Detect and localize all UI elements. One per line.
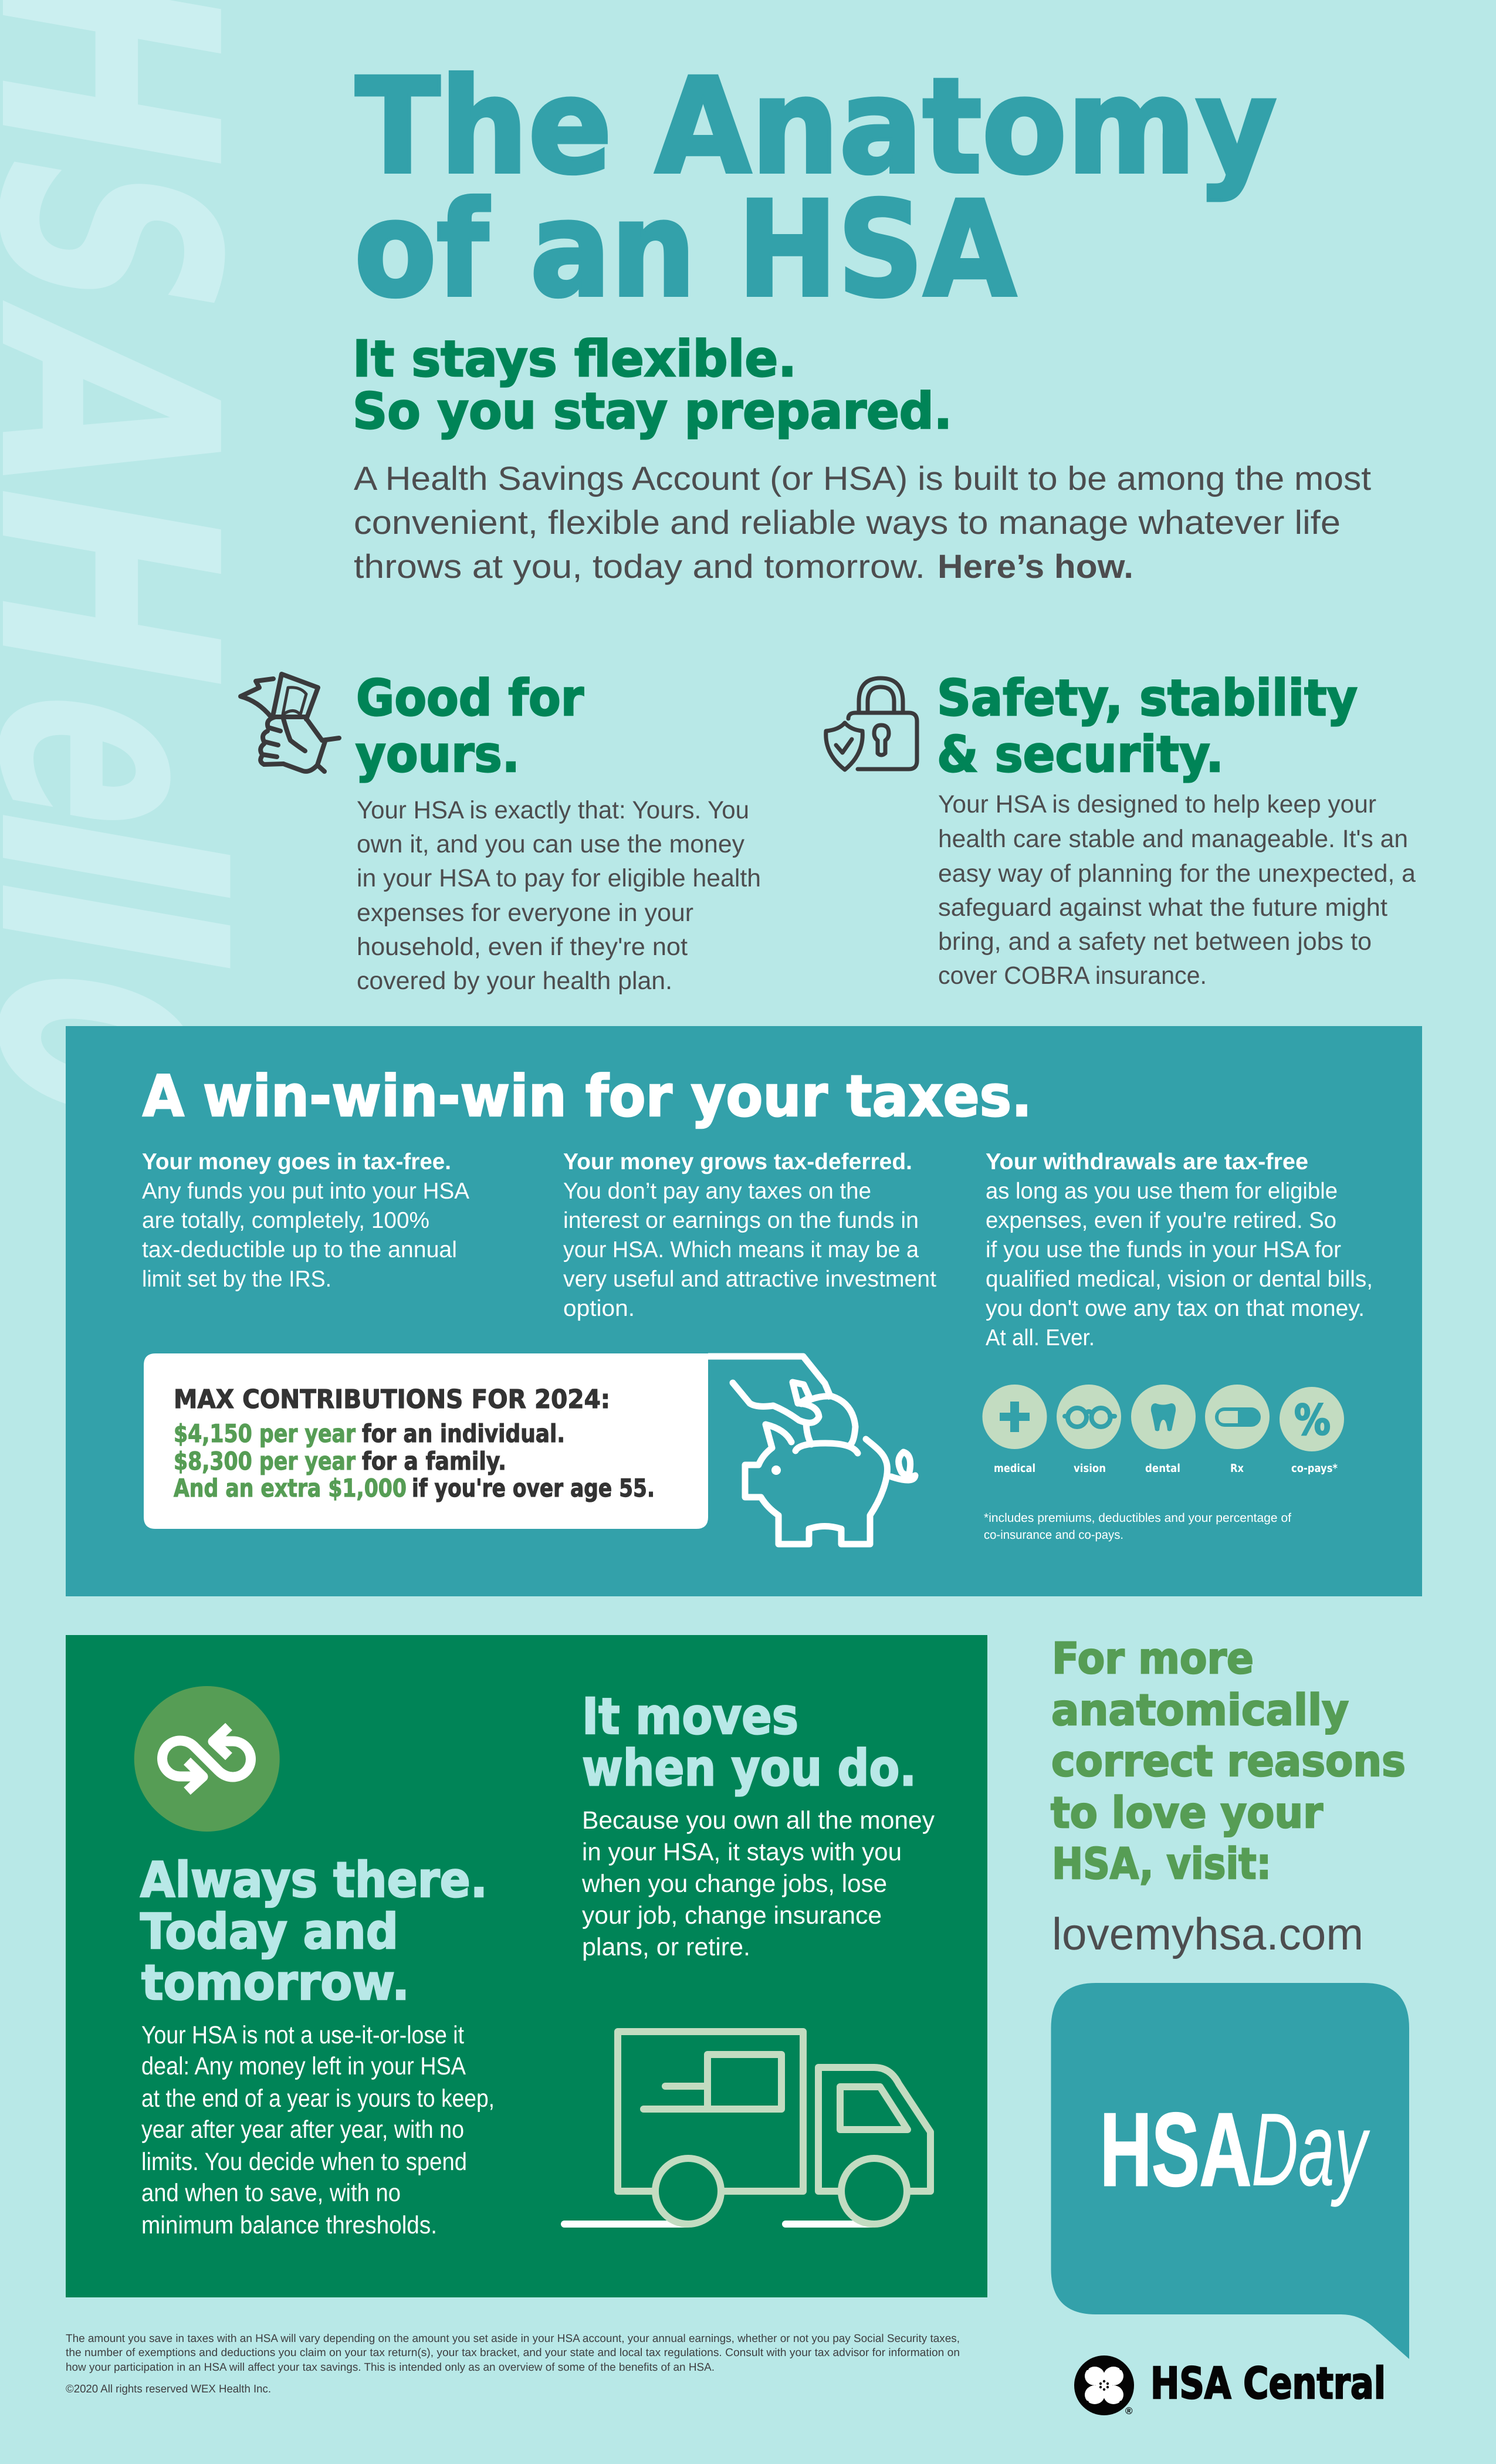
icon: dental: dental [1145, 1462, 1180, 1475]
body text: cover COBRA insurance. [938, 962, 1207, 990]
callout: max contributions: MAX CONTRIBUTIONS FOR 2024: [174, 1385, 610, 1414]
heading: it moves [582, 1688, 916, 1798]
column 1 [142, 1149, 469, 1292]
footnote: co-insurance and co-pays. [984, 1528, 1123, 1542]
heading: For more [1052, 1634, 1254, 1684]
column 3: Your withdrawals are tax-free [986, 1149, 1308, 1175]
callout: max contributions: $8,300 per year [174, 1447, 356, 1475]
intro paragraph [354, 460, 1371, 585]
column 2: Your money grows tax-deferred. [563, 1149, 912, 1175]
callout: max contributions: for an individual. [362, 1419, 565, 1448]
column 1: Any funds you put into your HSA [142, 1179, 469, 1204]
footnote [984, 1511, 1291, 1542]
body text: in your HSA to pay for eligible health [357, 865, 761, 892]
column 1: Your money goes in tax-free. [142, 1149, 451, 1175]
heading: always there [140, 1852, 488, 2011]
callout: max contributions [144, 1353, 708, 1529]
body: always there: and when to save, with no [141, 2179, 401, 2207]
body: always there: limits. You decide when to spend [141, 2148, 467, 2176]
column 2: your HSA. Which means it may be a [563, 1237, 919, 1263]
body: it moves [581, 1807, 935, 1961]
heading: & security. [937, 726, 1224, 784]
footer disclaimer: The amount you save in taxes with an HSA will vary depending on the amount you set aside in your HSA account, your annual earnings, whether or not you pay Social Security taxes, [66, 2333, 960, 2345]
logo: HSA Central: ® [1125, 2405, 1133, 2416]
body: it moves: Because you own all the money [582, 1807, 935, 1835]
logo: HSA Central: HSA Central [1150, 2358, 1386, 2409]
column 1: are totally, completely, 100% [142, 1208, 429, 1233]
body text: Your HSA is designed to help keep your [938, 791, 1376, 818]
heading: always there: Today and [140, 1903, 398, 1960]
heading: anatomically [1051, 1685, 1349, 1735]
body text: expenses for everyone in your [357, 899, 693, 927]
column 3: as long as you use them for eligible [986, 1179, 1338, 1204]
icon: vision [1057, 1385, 1121, 1475]
callout: max contributions: if you're over age 55. [412, 1474, 655, 1502]
logo: HSA Day speech bubble: Day [1251, 2091, 1370, 2208]
heading: yours. [356, 726, 520, 784]
icons row: eligible expenses [982, 1385, 1344, 1475]
column 3 [986, 1149, 1373, 1351]
column 3: qualified medical, vision or dental bills, [986, 1267, 1373, 1292]
subtitle [353, 330, 952, 441]
title [354, 50, 1277, 326]
body: it moves: your job, change insurance [582, 1902, 882, 1930]
icon: medical: medical [994, 1462, 1035, 1475]
column 2: interest or earnings on the funds in [563, 1208, 919, 1233]
body: it moves: in your HSA, it stays with you [582, 1839, 902, 1866]
icon: moving truck [564, 2032, 930, 2224]
title: The Anatomy [356, 50, 1277, 203]
body text: own it, and you can use the money [357, 831, 745, 858]
heading: correct reasons [1051, 1737, 1406, 1786]
subtitle: So you stay prepared. [353, 383, 952, 441]
panel: call to action [1051, 1634, 1406, 1959]
body: it moves: when you change jobs, lose [581, 1870, 887, 1898]
panel: taxes [66, 1026, 1422, 1596]
column 2: You don’t pay any taxes on the [563, 1179, 871, 1204]
body text [938, 791, 1416, 990]
body: always there: minimum balance thresholds. [141, 2212, 437, 2239]
logo: HSA Day speech bubble: HSA [1100, 2091, 1251, 2208]
column 2: option. [563, 1296, 635, 1321]
icon: co-pays: % [1294, 1396, 1331, 1444]
logo: HSA Central [1074, 2355, 1386, 2416]
callout: max contributions: for a family. [362, 1447, 506, 1475]
column 1: limit set by the IRS. [142, 1267, 331, 1292]
column 3: expenses, even if you're retired. So [986, 1208, 1336, 1233]
panel: safety, stability and security [826, 669, 1416, 990]
subtitle: It stays flexible. [353, 330, 797, 388]
body: always there: year after year after year, with no [141, 2116, 464, 2144]
column 3: if you use the funds in your HSA for [986, 1237, 1341, 1263]
body text: easy way of planning for the unexpected, a [938, 860, 1416, 888]
icon: co-pays [1280, 1387, 1344, 1475]
heading: HSA, visit: [1052, 1839, 1271, 1889]
body text [357, 797, 761, 995]
icon: lock and shield [826, 678, 917, 770]
column 3: you don't owe any tax on that money. [986, 1296, 1365, 1321]
heading: it moves: when you do. [582, 1739, 916, 1798]
heading: always there: Always there. [140, 1852, 488, 1908]
url: lovemyhsa.com [1052, 1909, 1363, 1959]
body text: household, even if they're not [357, 933, 688, 961]
heading: to love your [1051, 1788, 1323, 1838]
body: always there [141, 2022, 495, 2239]
heading [937, 669, 1358, 784]
body text: covered by your health plan. [357, 967, 672, 995]
icon: Rx: Rx [1230, 1462, 1244, 1475]
body: always there: Your HSA is not a use-it-or-lose it [141, 2022, 464, 2049]
footnote: *includes premiums, deductibles and your percentage of [984, 1511, 1291, 1525]
body: always there: at the end of a year is yours to keep, [141, 2085, 495, 2113]
intro paragraph: convenient, flexible and reliable ways to manage whatever life [354, 504, 1341, 541]
footer disclaimer: how your participation in an HSA will affect your tax savings. This is intended only as an overview of some of the benefits of an HSA. [66, 2361, 715, 2374]
heading: A win-win-win for your taxes. [143, 1063, 1032, 1129]
column 1: tax-deductible up to the annual [142, 1237, 457, 1263]
panel: good for yours [241, 669, 761, 995]
intro paragraph: throws at you, today and tomorrow. [354, 548, 925, 585]
icon: Rx [1205, 1385, 1270, 1475]
footer disclaimer: the number of exemptions and deductions you claim on your tax return(s), your tax bracket, and your state and local tax regulations. Consult with your tax advisor for information on [66, 2347, 960, 2359]
column 2 [563, 1149, 936, 1321]
callout: max contributions: $4,150 per year [174, 1419, 356, 1448]
icon: vision: vision [1074, 1462, 1106, 1475]
logo: HSA Day speech bubble [1051, 1983, 1409, 2359]
heading: always there: tomorrow. [141, 1954, 409, 2011]
watermark: HSAHello [0, 0, 321, 1160]
footer disclaimer: ©2020 All rights reserved WEX Health Inc. [66, 2383, 271, 2395]
body text: Your HSA is exactly that: Yours. You [357, 797, 749, 824]
heading: Good for [356, 669, 584, 727]
body text: safeguard against what the future might [938, 894, 1387, 922]
icon: hand holding money [241, 674, 339, 771]
icon: medical [982, 1385, 1047, 1475]
title: of an HSA [354, 173, 1016, 326]
icon: dental [1131, 1385, 1196, 1475]
icon: infinity arrows [134, 1686, 280, 1832]
body: it moves: plans, or retire. [582, 1934, 750, 1961]
column 2: very useful and attractive investment [563, 1267, 936, 1292]
intro paragraph: A Health Savings Account (or HSA) is built to be among the most [354, 460, 1371, 497]
icon: co-pays: co-pays* [1291, 1462, 1338, 1475]
footer disclaimer [66, 2333, 960, 2395]
intro paragraph: Here’s how. [937, 548, 1133, 585]
heading [356, 669, 584, 784]
column 3: At all. Ever. [986, 1325, 1095, 1351]
heading: it moves: It moves [582, 1688, 798, 1746]
body: always there: deal: Any money left in your HSA [141, 2053, 466, 2080]
heading: Safety, stability [937, 669, 1358, 727]
body text: health care stable and manageable. It's an [938, 825, 1408, 853]
panel: always there / it moves [66, 1635, 987, 2297]
body text: bring, and a safety net between jobs to [938, 928, 1372, 956]
icon: piggy bank with hand and coin [708, 1356, 915, 1544]
heading [1051, 1634, 1406, 1889]
callout: max contributions: And an extra $1,000 [174, 1474, 407, 1502]
